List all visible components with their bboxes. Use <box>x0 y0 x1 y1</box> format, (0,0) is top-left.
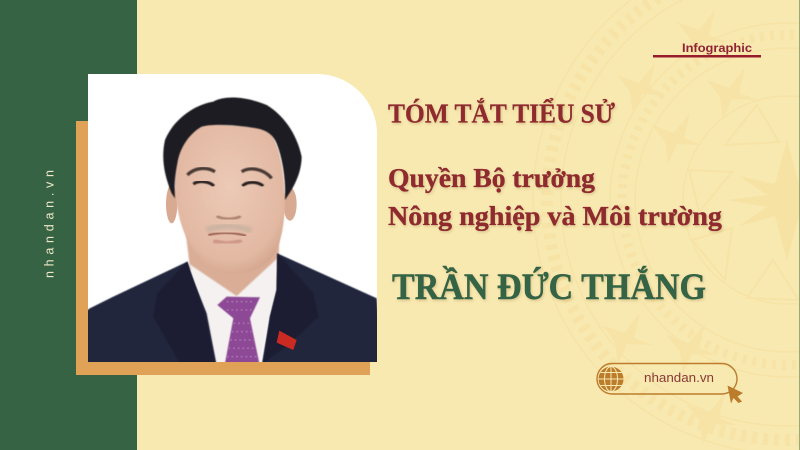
tie <box>217 297 260 363</box>
ears <box>166 185 177 223</box>
heading: tóm tắt tiểu sử: TÓM TẮT TIỂU SỬ <box>388 98 615 128</box>
green sidebar <box>0 0 137 450</box>
website label: nhandan.vn <box>644 371 714 385</box>
icon: globe <box>598 366 624 392</box>
hair <box>163 98 302 200</box>
right edge line <box>799 0 800 450</box>
suit right <box>262 253 382 365</box>
nose <box>217 216 241 219</box>
lapel pin <box>277 331 297 350</box>
lapels <box>153 253 318 363</box>
suit left <box>83 262 217 365</box>
website button <box>597 364 743 404</box>
infographic tag <box>653 43 761 58</box>
icon: cursor <box>728 386 743 404</box>
facial features <box>187 168 272 243</box>
decorative bronze drum pattern <box>533 0 800 450</box>
orange photo backing <box>76 121 370 375</box>
shirt <box>189 258 277 363</box>
name: TRẦN ĐỨC THẮNG <box>392 265 706 308</box>
lips <box>208 233 246 236</box>
portrait photo <box>83 74 382 365</box>
infographic tag: Infographic <box>682 43 753 55</box>
position title: Quyền Bộ trưởng <box>388 163 596 193</box>
neck <box>185 235 280 296</box>
position title <box>388 163 723 231</box>
tie pattern <box>227 302 258 357</box>
face <box>174 123 285 274</box>
eyes <box>193 182 263 186</box>
position title: Nông nghiệp và Môi trường <box>388 201 723 231</box>
sidebar site name: nhandan.vn <box>42 170 56 278</box>
stubble shade <box>207 226 252 231</box>
eyebrows <box>187 168 272 178</box>
